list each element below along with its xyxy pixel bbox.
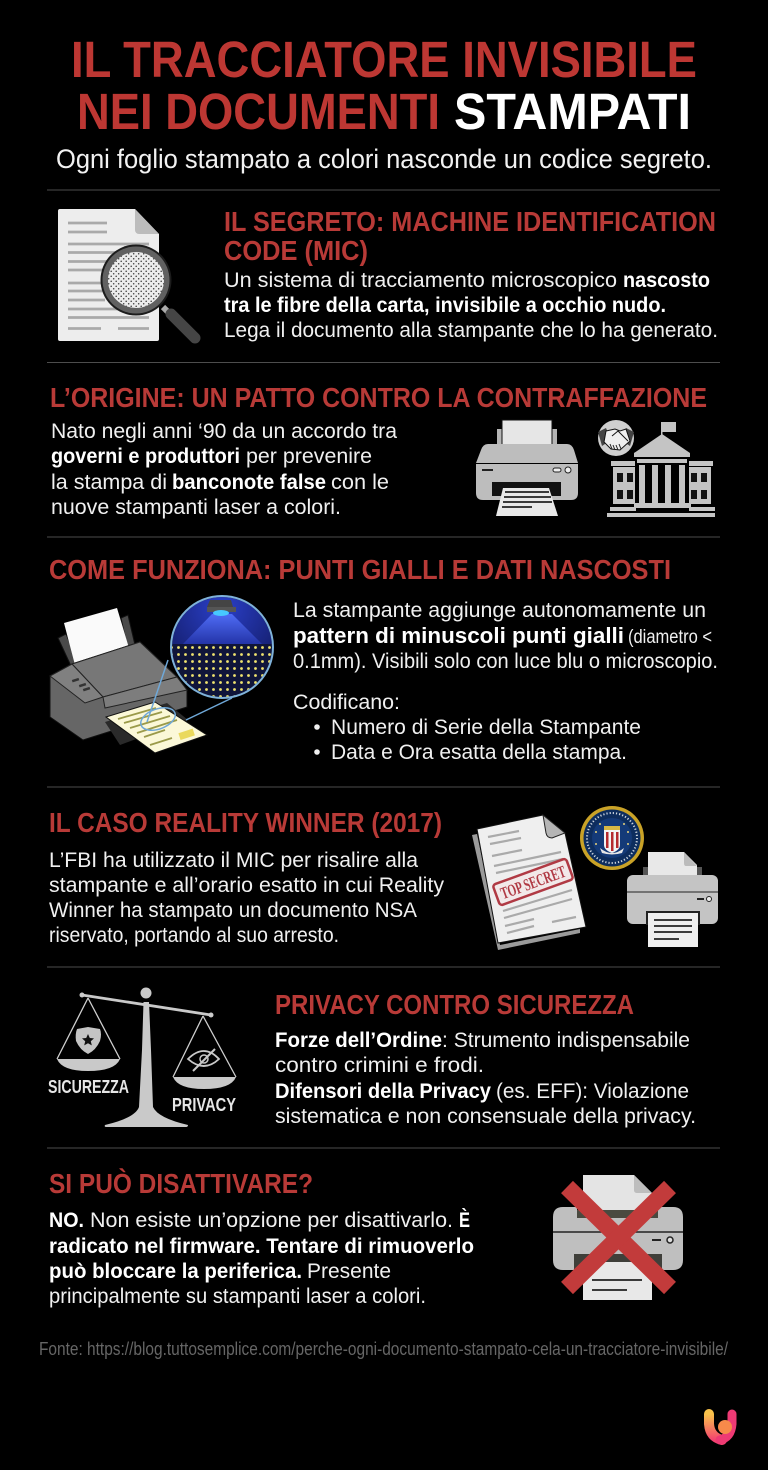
text: il segreto: tra le fibre della carta, invisibile a occhio nudo. — [224, 293, 666, 317]
text: privacy: Forze dell’Ordine — [275, 1028, 442, 1052]
text: il segreto: Lega il documento alla stampante che lo ha generato. — [224, 318, 718, 342]
text: disattivare: radicato nel firmware. Tentare di rimuoverlo — [49, 1234, 474, 1258]
panel: caso reality winner — [49, 806, 718, 950]
title: IL TRACCIATORE INVISIBILE — [71, 31, 697, 88]
panel: privacy contro sicurezza — [48, 988, 696, 1128]
text: come funziona: pattern di minuscoli punti gialli — [293, 623, 624, 648]
heading: origine: L’ORIGINE: UN PATTO CONTRO LA CONTRAFFAZIONE — [50, 382, 707, 413]
text: privacy: sistematica e non consensuale della privacy. — [275, 1104, 696, 1128]
text: origine: per prevenire — [246, 444, 372, 468]
text: origine: governi e produttori — [51, 444, 240, 468]
panel: origine — [50, 382, 715, 519]
title: NEI DOCUMENTI — [77, 83, 440, 140]
icon: document under magnifier — [58, 209, 195, 341]
icon: printer — [627, 852, 718, 947]
panel: come funziona — [49, 554, 718, 764]
text: origine: nuove stampanti laser a colori. — [51, 495, 341, 519]
text: disattivare: può bloccare la periferica. — [49, 1259, 302, 1283]
label: sicurezza: SICUREZZA — [48, 1077, 129, 1097]
heading: il segreto: CODE (MIC) — [224, 235, 368, 266]
text: disattivare: NO. — [49, 1208, 84, 1232]
text: disattivare: Non esiste un’opzione per disattivarlo. — [90, 1208, 453, 1232]
text: come funziona: Data e Ora esatta della stampa. — [331, 740, 627, 764]
text: il segreto: nascosto — [623, 268, 710, 292]
label: privacy: PRIVACY — [172, 1095, 236, 1115]
icon: crossed-out printer — [553, 1175, 683, 1300]
title: STAMPATI — [454, 83, 691, 140]
text: come funziona: La stampante aggiunge autonomamente un — [293, 598, 706, 622]
icon: logo — [709, 1414, 732, 1440]
icon: top secret document — [472, 815, 586, 950]
text: privacy: contro crimini e frodi. — [275, 1053, 484, 1077]
panel: il segreto — [58, 206, 718, 342]
heading: come funziona: COME FUNZIONA: PUNTI GIALLI E DATI NASCOSTI — [49, 554, 671, 585]
text: il segreto: Un sistema di tracciamento microscopico — [224, 268, 617, 292]
text: come funziona — [293, 598, 718, 764]
text: come funziona: 0.1mm). Visibili solo con luce blu o microscopio. — [293, 649, 718, 673]
heading: il segreto — [224, 206, 716, 266]
text: il segreto — [224, 268, 718, 342]
text: reality winner: riservato, portando al suo arresto. — [49, 923, 339, 947]
text: disattivare: principalmente su stampanti laser a colori. — [49, 1284, 426, 1308]
text: disattivare: Presente — [307, 1259, 391, 1283]
heading: il segreto: IL SEGRETO: MACHINE IDENTIFICATION — [224, 206, 716, 237]
heading: privacy: PRIVACY CONTRO SICUREZZA — [275, 989, 634, 1020]
text: origine — [51, 419, 397, 519]
subtitle: Ogni foglio stampato a colori nasconde un codice segreto. — [56, 144, 712, 174]
text: come funziona: Numero di Serie della Stampante — [331, 715, 641, 739]
text: privacy: Difensori della Privacy — [275, 1079, 491, 1103]
icon: printer — [476, 420, 578, 516]
text: privacy: : Strumento indispensabile — [442, 1028, 690, 1052]
text: come funziona: (diametro < — [628, 627, 712, 648]
text: reality winner: L’FBI ha utilizzato il MIC per risalire alla — [49, 848, 418, 872]
icon: printer with sheet — [50, 608, 232, 753]
icon: balance scale — [57, 988, 236, 1127]
text: disattivare — [49, 1207, 474, 1308]
icon: FBI seal — [580, 806, 644, 870]
text: origine: con le — [331, 470, 389, 494]
panel: si puo disattivare — [49, 1168, 683, 1308]
text: reality winner — [49, 848, 444, 947]
icon: handshake — [598, 420, 634, 456]
text: come funziona: Codificano: — [293, 690, 400, 714]
heading: disattivare: SI PUÒ DISATTIVARE? — [49, 1168, 313, 1199]
text: privacy — [275, 1028, 696, 1128]
title — [71, 31, 697, 140]
text: origine: banconote false — [172, 470, 326, 494]
icon: top secret document: TOP SECRET — [498, 862, 569, 903]
text: privacy: (es. EFF): Violazione — [496, 1079, 689, 1103]
text: disattivare: È — [459, 1207, 470, 1232]
text: reality winner: stampante e all’orario esatto in cui Reality — [49, 873, 444, 897]
heading: reality winner: IL CASO REALITY WINNER (2017) — [49, 807, 442, 838]
text: reality winner: Winner ha stampato un documento NSA — [49, 898, 418, 922]
icon: blue light magnifier with yellow dots — [170, 596, 274, 700]
text: origine: la stampa di — [51, 470, 167, 494]
icon: government building — [607, 422, 715, 517]
text: origine: Nato negli anni ‘90 da un accordo tra — [51, 419, 397, 443]
